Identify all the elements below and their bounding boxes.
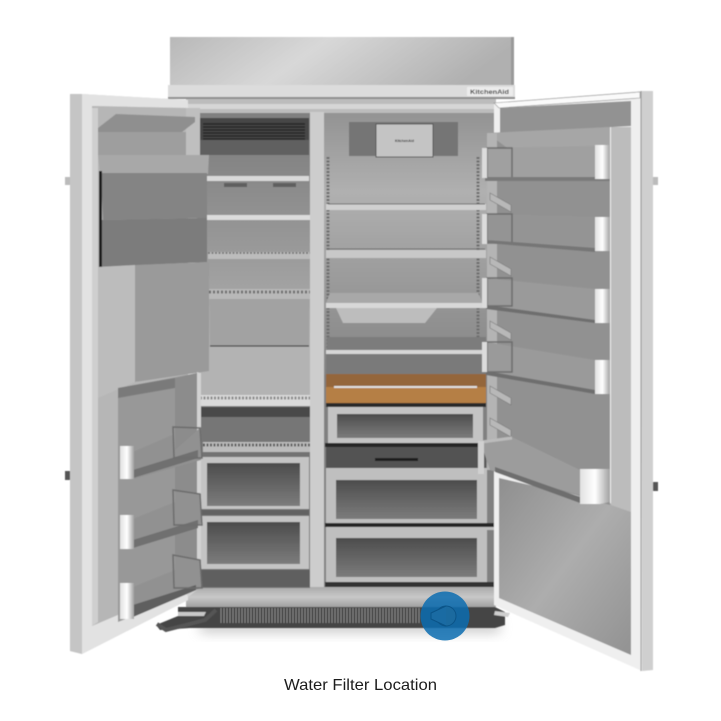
door side tabs <box>653 177 658 491</box>
fridge drawer 2 <box>326 468 494 523</box>
freezer vent <box>197 118 309 155</box>
ice bin lower <box>99 218 207 267</box>
ice dispenser cap <box>98 114 209 174</box>
water filter highlight <box>420 592 470 640</box>
fridge drawer 1 <box>328 407 483 443</box>
right door bin 4 <box>482 342 610 394</box>
floor shadow <box>200 622 500 632</box>
freezer drawer 1 <box>200 457 309 509</box>
right door bin 5 <box>478 437 610 504</box>
drawer handle shelf <box>326 447 486 468</box>
crisper bin <box>336 308 437 323</box>
top grille panel <box>168 37 515 99</box>
left door <box>65 94 216 654</box>
door top panel <box>500 101 631 133</box>
door bottom panel <box>499 478 631 655</box>
left door bin 3 <box>120 555 202 619</box>
interior light module: KitchenAid <box>395 139 414 143</box>
left door bin 2 <box>120 490 202 549</box>
caption: Water Filter Location <box>284 677 437 694</box>
interior light module <box>349 122 458 157</box>
door hinge handle <box>157 610 216 630</box>
cabinet frame <box>186 99 496 607</box>
right door bin 2 <box>482 214 610 252</box>
freezer compartment <box>197 118 310 588</box>
wood drawer <box>326 374 486 407</box>
ice bin upper <box>101 173 207 220</box>
divider brackets 2 <box>490 321 511 437</box>
refrigerator compartment <box>324 113 495 587</box>
fridge drawer 3 <box>326 527 494 582</box>
door liner with bins <box>118 372 202 622</box>
right door <box>478 91 658 671</box>
right door bin 1 <box>482 145 610 181</box>
toe grille <box>156 607 510 630</box>
divider brackets 1 <box>490 193 511 276</box>
door liner back <box>487 127 610 505</box>
hoop side <box>611 127 631 512</box>
door side tabs <box>65 177 70 480</box>
right door bin 3 <box>482 278 610 323</box>
left door bin 1 <box>120 427 202 479</box>
door jamb above dispenser <box>186 108 200 178</box>
freezer drawer 2 <box>200 516 309 569</box>
top grille panel: KitchenAid <box>470 89 509 96</box>
dispenser lower housing <box>98 262 209 398</box>
